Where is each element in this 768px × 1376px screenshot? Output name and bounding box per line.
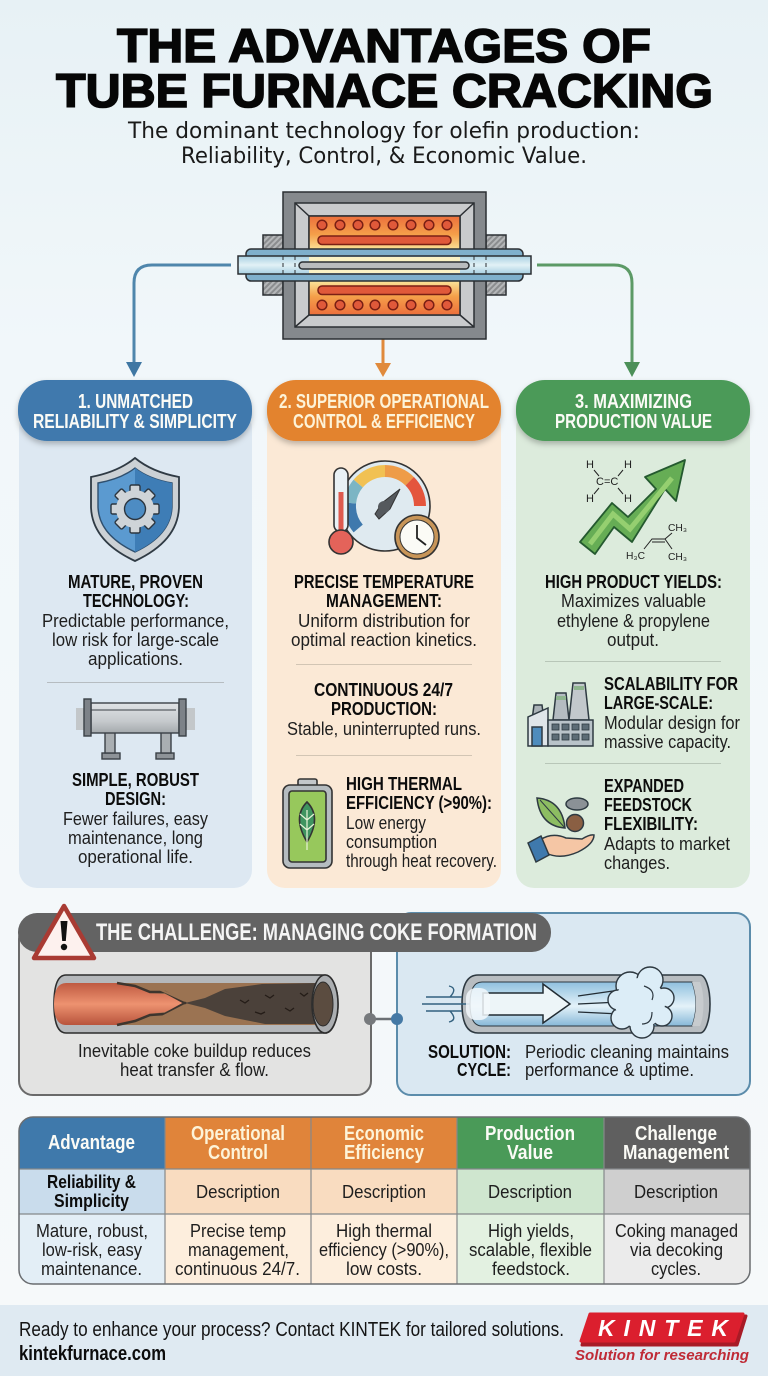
icon: battery with leaf [283, 779, 332, 868]
table third row: scalable, flexible [469, 1239, 592, 1260]
text: solution cycle: performance & uptime. [525, 1059, 694, 1080]
text: expanded feedstock flexibility [604, 775, 730, 873]
footer band [0, 1305, 768, 1376]
text: mature proven technology: Predictable performance, [42, 610, 229, 631]
panel background [516, 410, 750, 888]
table third row: High yields, [488, 1220, 574, 1241]
challenge heading banner [18, 913, 551, 952]
text: high product yields: output. [607, 629, 659, 650]
text: scalability for large scale: LARGE-SCALE: [604, 692, 713, 713]
footer call to action: kintekfurnace.com [19, 1343, 166, 1365]
panel header: 2. SUPERIOR OPERATIONAL [279, 390, 489, 413]
panel background [19, 410, 252, 888]
text: high thermal efficiency: Low energy [346, 812, 427, 833]
panel: maximizing production value [516, 380, 750, 888]
logo: KINTEK: KINTEK [598, 1315, 729, 1341]
text: precise temperature management: PRECISE TEMPERATURE [294, 571, 474, 592]
text: mature proven technology: TECHNOLOGY: [83, 590, 189, 611]
panel background [267, 410, 501, 888]
table third row: maintenance. [41, 1258, 142, 1279]
title [56, 19, 713, 117]
table third row: management, [188, 1239, 289, 1260]
table header row: Operational [191, 1122, 285, 1145]
table third row [36, 1220, 738, 1279]
text: simple robust design: SIMPLE, ROBUST [72, 769, 200, 790]
text: expanded feedstock flexibility: FLEXIBILITY: [604, 813, 698, 834]
text: mature proven technology: MATURE, PROVEN [68, 571, 203, 592]
text: high thermal efficiency: through heat recovery. [346, 850, 497, 871]
subtitle: The dominant technology for olefin production: [127, 119, 640, 144]
icon: rising arrow with molecules: H [586, 493, 594, 505]
text: high thermal efficiency: HIGH THERMAL [346, 773, 462, 794]
subtitle: Reliability, Control, & Economic Value. [181, 144, 587, 169]
text: continuous production: Stable, uninterrupted runs. [287, 718, 481, 739]
text: scalability for large scale: massive capacity. [604, 731, 731, 752]
table third row: continuous 24/7. [175, 1258, 300, 1279]
title: TUBE FURNACE CRACKING [56, 64, 713, 117]
icon: hand holding feedstock [528, 798, 594, 862]
table header row: Advantage [48, 1131, 135, 1154]
icon: rising arrow with molecules: H₃C [626, 551, 645, 562]
text: coke caption: Inevitable coke buildup reduces [78, 1040, 311, 1061]
text: precise temperature management [291, 571, 477, 650]
table second row [47, 1171, 718, 1211]
table third row: low-risk, easy [42, 1239, 143, 1260]
text: continuous production: PRODUCTION: [331, 698, 437, 719]
icon: tube furnace diagram [238, 192, 531, 339]
comparison table [19, 1117, 750, 1284]
footer call to action [19, 1319, 564, 1365]
table header row: Management [623, 1141, 729, 1164]
panel header [18, 380, 252, 441]
table third row: feedstock. [492, 1258, 570, 1279]
text: simple robust design: DESIGN: [105, 788, 166, 809]
icon: rising arrow with molecules: H [624, 493, 632, 505]
panel header [516, 380, 750, 441]
table third row: Coking managed [615, 1220, 738, 1241]
text: solution cycle: SOLUTION: [428, 1041, 511, 1062]
text: simple robust design [63, 769, 209, 867]
icon: rising arrow with molecules: H [586, 459, 594, 471]
text: expanded feedstock flexibility: Adapts to market [604, 833, 730, 854]
text: precise temperature management: Uniform distribution for [298, 610, 470, 631]
table header row: Efficiency [344, 1141, 424, 1164]
text: scalability for large scale [604, 673, 740, 752]
arrow: furnace to reliability [126, 265, 231, 377]
text: high product yields [545, 571, 722, 650]
subtitle [127, 119, 640, 169]
table third row: cycles. [651, 1258, 701, 1279]
panel header: 1. UNMATCHED [78, 390, 193, 413]
text: scalability for large scale: SCALABILITY FOR [604, 673, 738, 694]
arrow: furnace to production value [537, 265, 640, 377]
panel header [267, 380, 501, 441]
panel header: CONTROL & EFFICIENCY [293, 410, 475, 433]
table third row: High thermal [336, 1220, 432, 1241]
table header row: Economic [344, 1122, 424, 1145]
text: coke caption: heat transfer & flow. [120, 1059, 269, 1080]
icon: rising arrow with molecules [580, 459, 687, 563]
icon: rising arrow with molecules: H [624, 459, 632, 471]
table header row: Value [507, 1141, 553, 1164]
text: simple robust design: maintenance, long [68, 827, 203, 848]
panel header: RELIABILITY & SIMPLICITY [33, 410, 237, 433]
text: high thermal efficiency: EFFICIENCY (>90%): [346, 792, 492, 813]
table second row: Description [488, 1181, 572, 1202]
panel: challenge coke formation [19, 925, 371, 1095]
icon: rising arrow with molecules: C=C [596, 476, 618, 488]
footer call to action: Ready to enhance your process? Contact KINTEK for tailored solutions. [19, 1319, 564, 1341]
text: simple robust design: operational life. [78, 846, 193, 867]
text: continuous production: CONTINUOUS 24/7 [314, 679, 453, 700]
text: solution cycle: Periodic cleaning maintains [525, 1041, 729, 1062]
text: simple robust design: Fewer failures, easy [63, 808, 209, 829]
table second row: Simplicity [54, 1190, 130, 1211]
table header row [48, 1122, 729, 1164]
icon: gauge thermometer and clock [329, 461, 439, 559]
text: mature proven technology [42, 571, 229, 669]
table second row: Description [634, 1181, 718, 1202]
table third row: via decoking [630, 1239, 723, 1260]
text: coke caption [78, 1040, 311, 1080]
text: high product yields: HIGH PRODUCT YIELDS: [545, 571, 722, 592]
text: expanded feedstock flexibility: EXPANDED [604, 775, 684, 796]
table header row: Production [485, 1122, 575, 1145]
table third row: low costs. [346, 1258, 422, 1279]
icon: warning triangle [34, 906, 94, 958]
table header row: Control [208, 1141, 268, 1164]
table second row: Description [342, 1181, 426, 1202]
text: precise temperature management: optimal reaction kinetics. [291, 629, 477, 650]
logo: KINTEK [575, 1314, 749, 1364]
icon: pipe with coke buildup [54, 975, 338, 1033]
challenge heading banner: THE CHALLENGE: MANAGING COKE FORMATION [96, 919, 537, 946]
logo: KINTEK: Solution for researching [575, 1348, 749, 1364]
text: mature proven technology: applications. [88, 648, 183, 669]
text: scalability for large scale: Modular design for [604, 712, 740, 733]
connector between challenge and solution [364, 1013, 403, 1025]
icon: shield with gear [91, 458, 179, 561]
table third row: Mature, robust, [36, 1220, 148, 1241]
text: solution cycle [428, 1041, 729, 1080]
table second row: Description [196, 1181, 280, 1202]
text: high thermal efficiency: consumption [346, 831, 437, 852]
icon: pipe on stands [76, 699, 195, 759]
panel: reliability and simplicity [18, 380, 252, 888]
text: high product yields: ethylene & propylene [557, 610, 710, 631]
panel header: 3. MAXIMIZING [575, 390, 692, 413]
table header row: Challenge [635, 1122, 717, 1145]
panel header: PRODUCTION VALUE [555, 410, 712, 433]
icon: factory [528, 683, 593, 746]
icon: rising arrow with molecules: CH₃ [668, 523, 687, 534]
text: solution cycle: CYCLE: [457, 1059, 511, 1080]
text: high thermal efficiency [346, 773, 497, 871]
panel: operational control and efficiency [267, 380, 501, 888]
arrow: furnace to control [375, 339, 391, 377]
text: continuous production [287, 679, 481, 739]
table second row: Reliability & [47, 1171, 136, 1192]
icon: pipe with cleaning flow [422, 967, 710, 1038]
text: high product yields: Maximizes valuable [561, 590, 706, 611]
icon: rising arrow with molecules: CH₃ [668, 552, 687, 563]
text: mature proven technology: low risk for large-scale [52, 629, 219, 650]
table third row: efficiency (>90%), [319, 1239, 449, 1260]
text: expanded feedstock flexibility: changes. [604, 852, 670, 873]
panel: solution cycle [397, 913, 750, 1095]
text: expanded feedstock flexibility: FEEDSTOCK [604, 794, 692, 815]
table third row: Precise temp [190, 1220, 286, 1241]
text: precise temperature management: MANAGEMENT: [326, 590, 442, 611]
title: THE ADVANTAGES OF [117, 19, 651, 72]
